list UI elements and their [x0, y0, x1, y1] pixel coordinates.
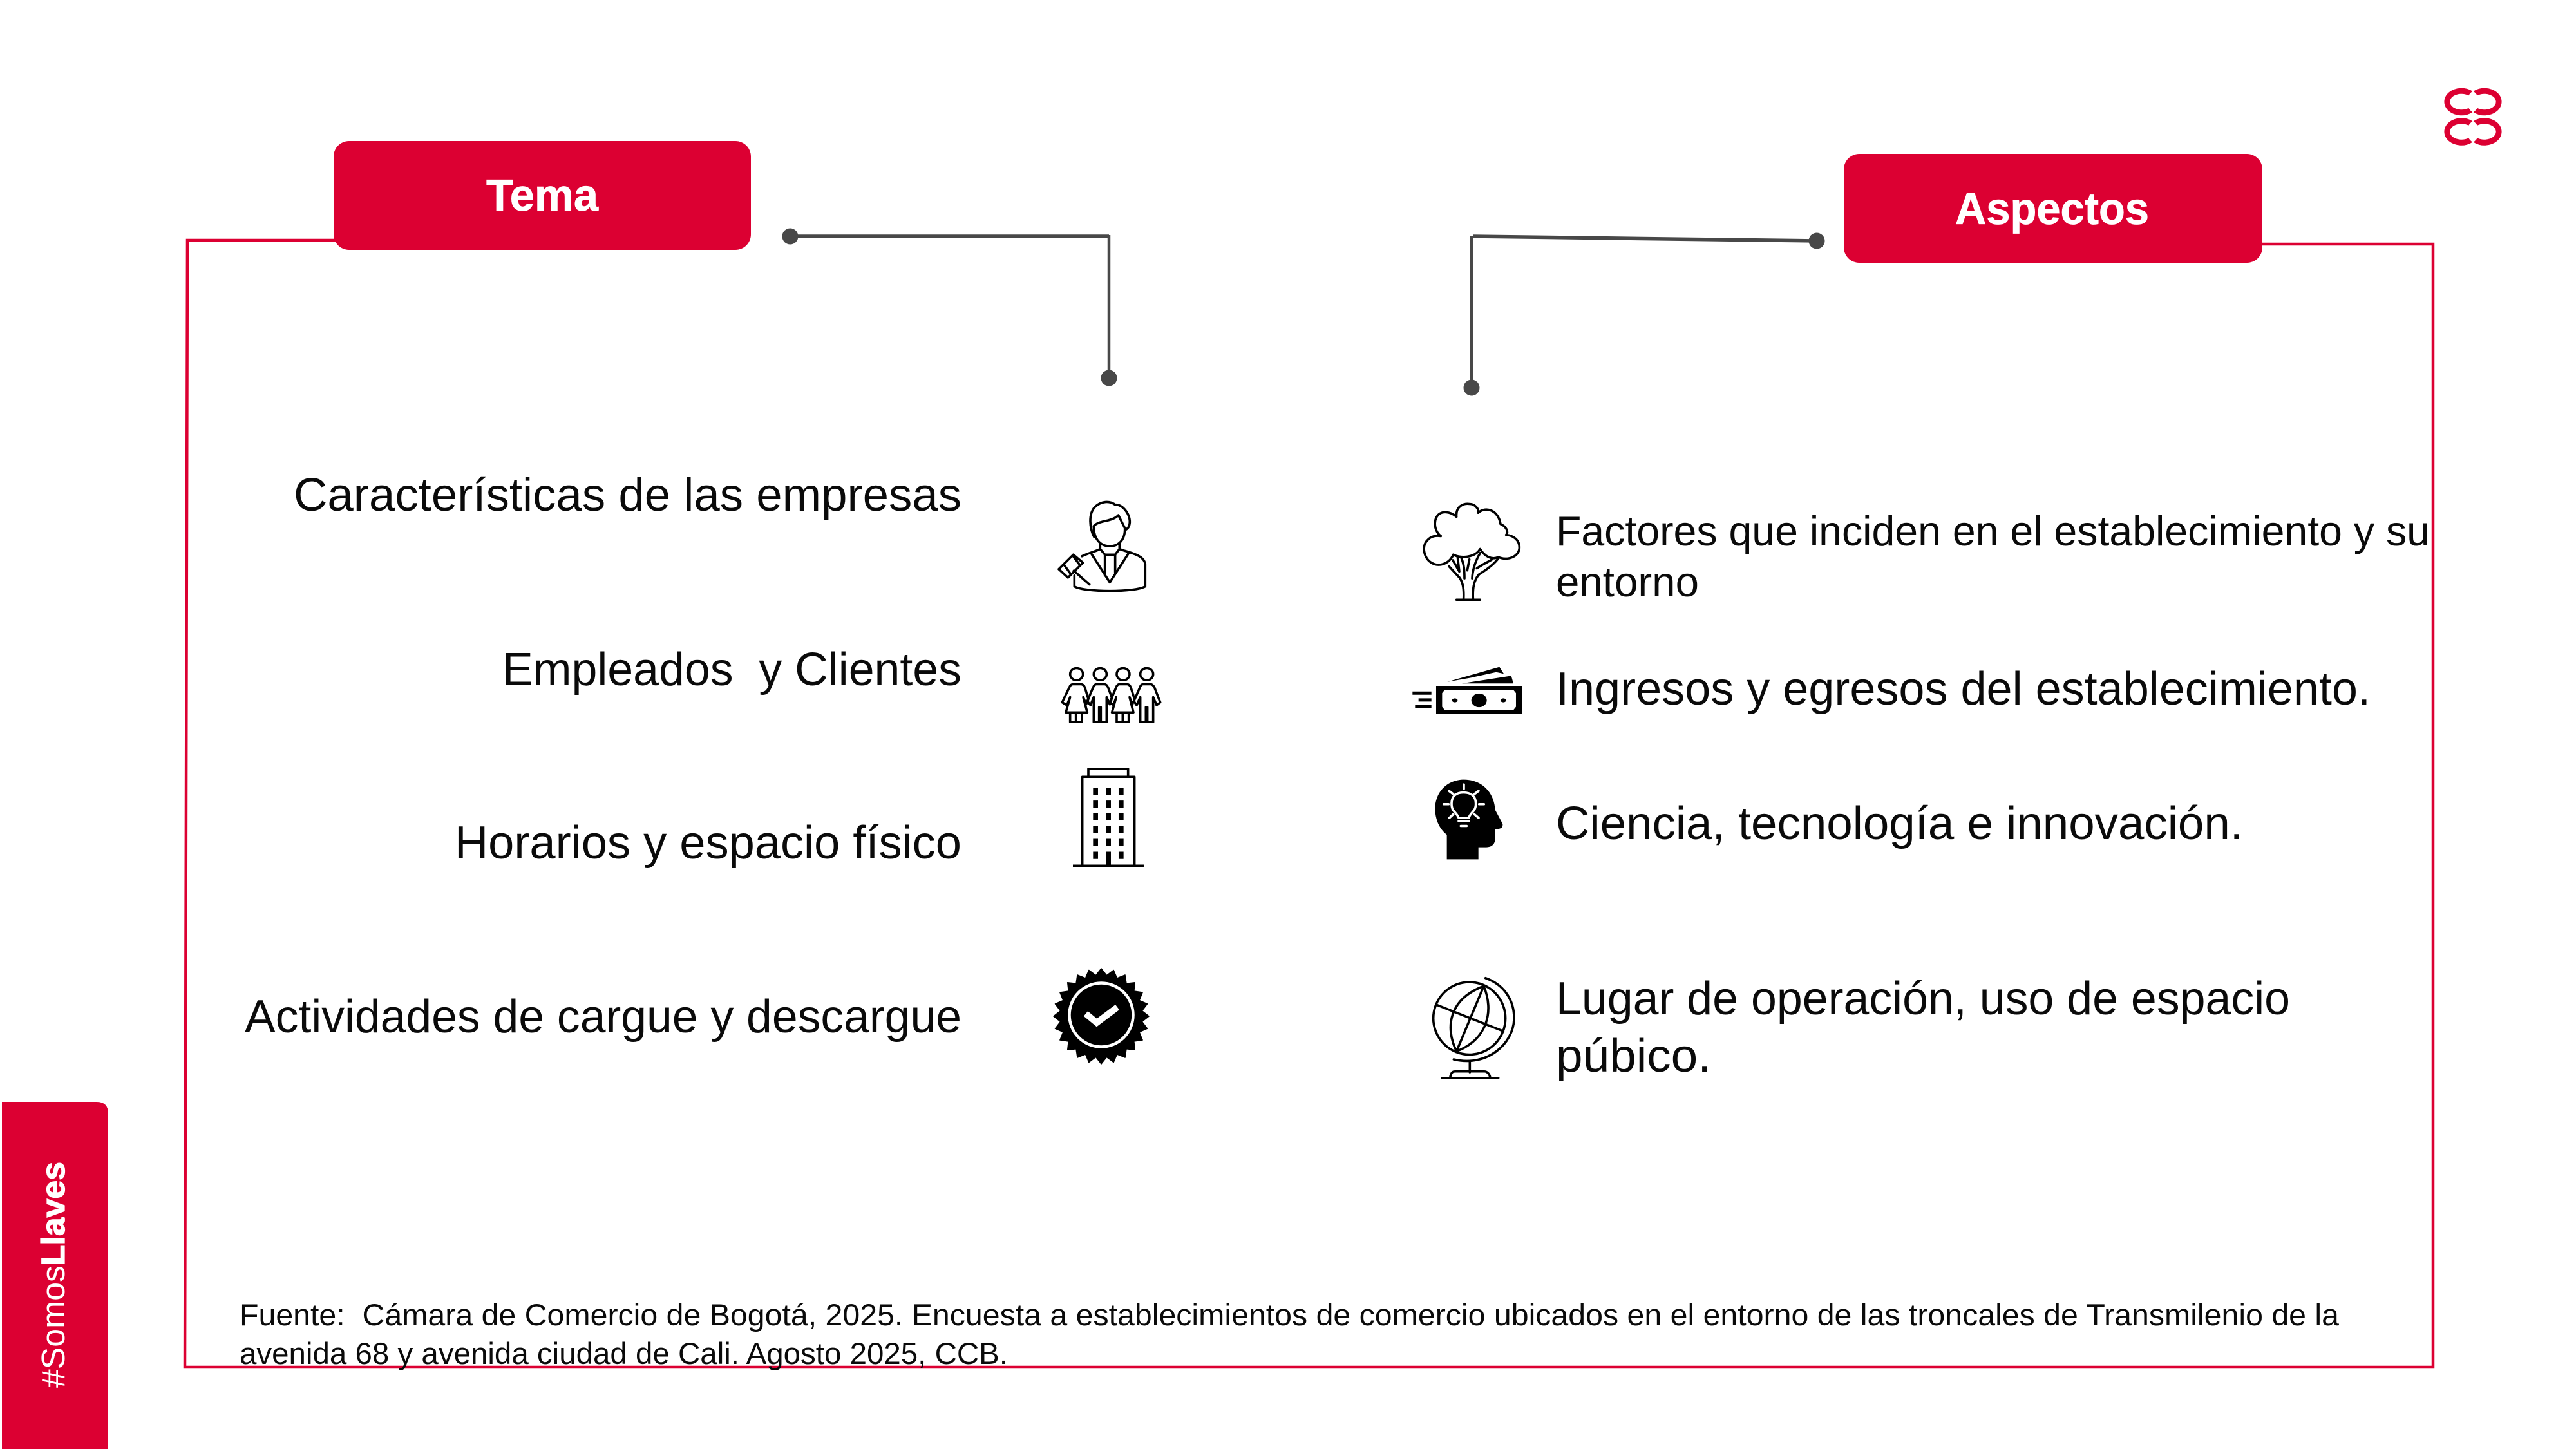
- panel frame: [185, 240, 2433, 1367]
- sidebar: #SomosLlaves: [2, 1102, 108, 1449]
- text: Empleados y Clientes: Empleados y Clientes: [502, 644, 961, 696]
- text: Características de las empresas: Características de las empresas: [294, 469, 961, 521]
- icon: group of people: [1062, 668, 1160, 722]
- text: Factores que inciden: [1556, 507, 2430, 605]
- heading: Tema: Tema: [486, 170, 599, 220]
- text: Ingresos y egresos: Ingresos y egresos del establecimiento.: [1556, 663, 2371, 715]
- heading: Aspectos: [1844, 154, 2262, 263]
- text: Actividades de cargue y descargue: Actividades de cargue y descargue: [245, 991, 961, 1043]
- icon: head with lightbulb: [1435, 780, 1502, 859]
- icon: money: [1412, 667, 1522, 714]
- connector: Tema: [782, 228, 1117, 386]
- text: Horarios y espacio físico: Horarios y espacio físico: [455, 817, 961, 869]
- source note: avenida 68 y avenida ciudad de Cali. Agosto 2025, CCB.: [240, 1336, 1008, 1370]
- text: Factores que inciden: entorno: [1556, 558, 1699, 605]
- icon: tree: [1424, 504, 1519, 600]
- heading: Tema: [334, 141, 751, 250]
- source note: [240, 1298, 2340, 1370]
- text: Lugar de operación: Lugar de operación, uso de espacio: [1556, 973, 2290, 1025]
- text: Lugar de operación: [1556, 973, 2290, 1082]
- logo: [2444, 88, 2502, 146]
- icon: check badge: [1054, 969, 1149, 1064]
- icon: globe: [1434, 978, 1514, 1078]
- text: Factores que inciden: Factores que inciden en el establecimiento y su: [1556, 507, 2430, 554]
- text: Lugar de operación: púbico.: [1556, 1030, 1711, 1082]
- sidebar: #SomosLlaves: #SomosLlaves: [35, 1162, 71, 1388]
- source note: Fuente: Cámara de Comercio de Bogotá, 2025. Encuesta a establecimientos de comercio ubicados en el entorno de las troncales de Transmilenio de la: [240, 1298, 2340, 1332]
- text: Ciencia, tecnología e innovación: Ciencia, tecnología e innovación.: [1556, 798, 2243, 849]
- icon: person with gavel: [1059, 502, 1145, 591]
- icon: office building: [1073, 769, 1144, 867]
- connector: Aspectos: [1463, 233, 1825, 395]
- heading: Aspectos: Aspectos: [1955, 184, 2149, 234]
